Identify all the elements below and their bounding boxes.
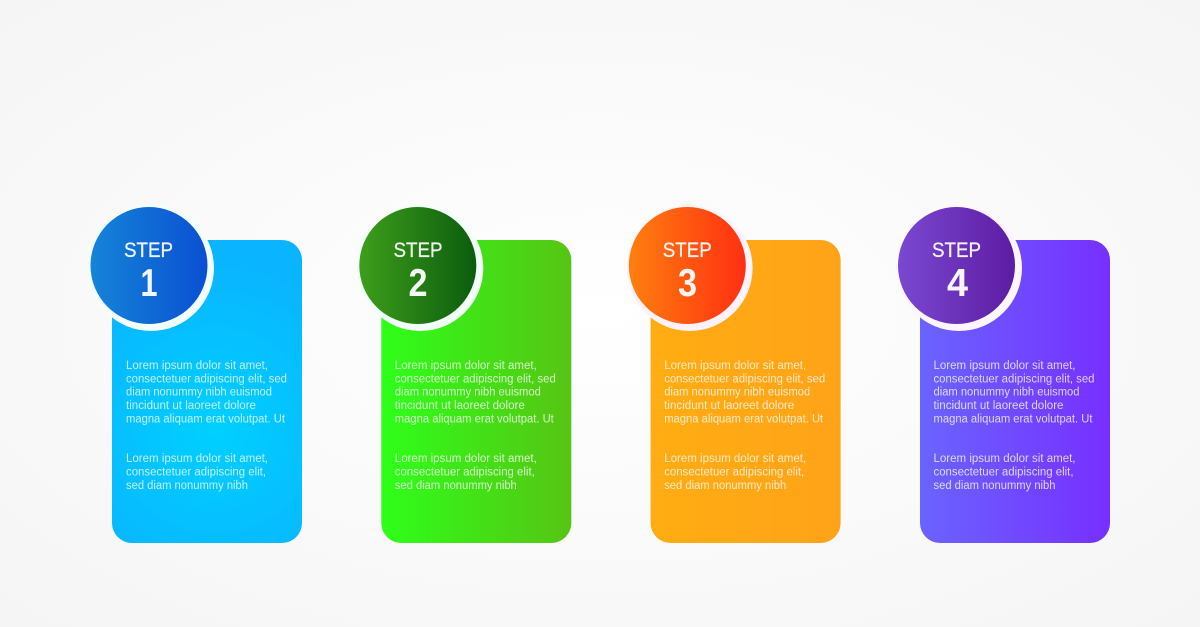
text block: step 2 first paragraph: [395, 360, 556, 426]
text block: step 4 first paragraph: magna aliquam erat volutpat. Ut: [934, 414, 1093, 426]
text block: step 2 first paragraph: tincidunt ut laoreet dolore: [395, 400, 525, 412]
text block: step 1 second paragraph: sed diam nonummy nibh: [126, 480, 248, 492]
text block: step 4 first paragraph: tincidunt ut laoreet dolore: [934, 400, 1064, 412]
text block: step 4 first paragraph: Lorem ipsum dolor sit amet,: [934, 360, 1076, 372]
text block: step 4 second paragraph: Lorem ipsum dolor sit amet,: [934, 453, 1076, 465]
text block: step 3 second paragraph: Lorem ipsum dolor sit amet,: [664, 453, 806, 465]
panel: step 4: [896, 205, 1110, 543]
text block: step 3 first paragraph: consectetuer adipiscing elit, sed: [664, 374, 825, 386]
text block: step 1 first paragraph: [126, 360, 287, 426]
number: 4: 4: [947, 262, 968, 305]
badge: step 2 circle: [357, 205, 483, 331]
text block: step 4 first paragraph: diam nonummy nibh euismod: [934, 386, 1080, 398]
text block: step 1 first paragraph: Lorem ipsum dolor sit amet,: [126, 360, 268, 372]
text block: step 3 first paragraph: diam nonummy nibh euismod: [664, 386, 810, 398]
card: step 4 background: [920, 240, 1110, 543]
label: STEP 4: STEP: [932, 239, 981, 262]
panel: step 1: [88, 205, 302, 543]
text block: step 4 second paragraph: consectetuer adipiscing elit,: [934, 466, 1074, 478]
text block: step 4 second paragraph: [934, 453, 1076, 492]
text block: step 2 first paragraph: magna aliquam erat volutpat. Ut: [395, 414, 555, 426]
text block: step 2 second paragraph: [395, 453, 537, 492]
card: step 1 background: [112, 240, 302, 543]
badge: step 4 circle: [896, 205, 1022, 331]
text block: step 3 first paragraph: tincidunt ut laoreet dolore: [664, 400, 794, 412]
panel: step 3: [627, 205, 841, 543]
badge: step 1 circle: [88, 205, 214, 331]
card: step 2 background: [381, 240, 571, 543]
text block: step 3 second paragraph: consectetuer adipiscing elit,: [664, 466, 804, 478]
text block: step 1 first paragraph: tincidunt ut laoreet dolore: [126, 400, 256, 412]
text block: step 1 first paragraph: diam nonummy nibh euismod: [126, 386, 272, 398]
text block: step 2 first paragraph: consectetuer adipiscing elit, sed: [395, 374, 556, 386]
text block: step 3 second paragraph: [664, 453, 806, 492]
badge: step 3 circle: [627, 205, 753, 331]
number: 3: 3: [678, 262, 697, 305]
label: STEP 1: STEP: [124, 239, 173, 262]
text block: step 1 first paragraph: magna aliquam erat volutpat. Ut: [126, 414, 286, 426]
text block: step 2 first paragraph: diam nonummy nibh euismod: [395, 386, 541, 398]
label: STEP 2: STEP: [394, 239, 442, 262]
text block: step 2 second paragraph: consectetuer adipiscing elit,: [395, 466, 535, 478]
text block: step 1 second paragraph: Lorem ipsum dolor sit amet,: [126, 453, 268, 465]
text block: step 2 first paragraph: Lorem ipsum dolor sit amet,: [395, 360, 537, 372]
number: 2: 2: [408, 262, 428, 305]
text block: step 3 first paragraph: magna aliquam erat volutpat. Ut: [664, 414, 824, 426]
text block: step 4 first paragraph: consectetuer adipiscing elit, sed: [934, 374, 1094, 386]
text block: step 1 first paragraph: consectetuer adipiscing elit, sed: [126, 374, 287, 386]
text block: step 4 second paragraph: sed diam nonummy nibh: [934, 480, 1056, 492]
text block: step 4 first paragraph: [934, 360, 1094, 426]
text block: step 2 second paragraph: sed diam nonummy nibh: [395, 480, 517, 492]
number: 1: 1: [140, 262, 158, 305]
text block: step 3 second paragraph: sed diam nonummy nibh: [664, 480, 786, 492]
panel: step 2: [357, 205, 571, 543]
text block: step 1 second paragraph: [126, 453, 268, 492]
text block: step 2 second paragraph: Lorem ipsum dolor sit amet,: [395, 453, 537, 465]
text block: step 3 first paragraph: Lorem ipsum dolor sit amet,: [664, 360, 806, 372]
text block: step 3 first paragraph: [664, 360, 825, 426]
text block: step 1 second paragraph: consectetuer adipiscing elit,: [126, 466, 266, 478]
card: step 3 background: [651, 240, 841, 543]
label: STEP 3: STEP: [663, 239, 712, 262]
